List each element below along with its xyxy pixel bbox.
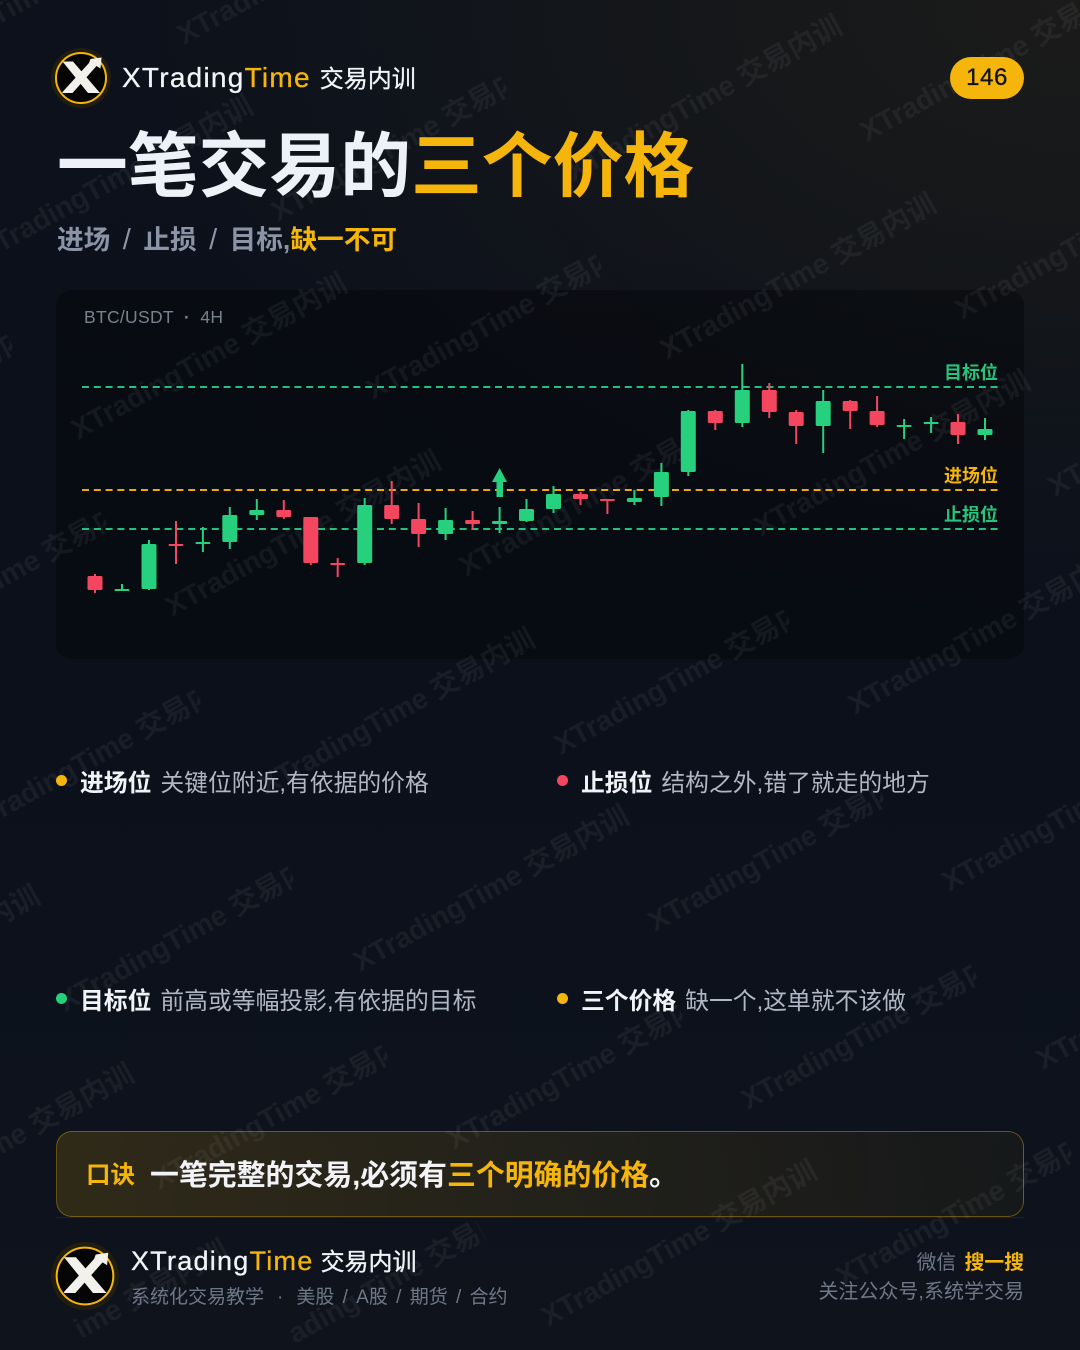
callout: mnemonic text: 一笔完整的交易,必须有三个明确的价格。 bbox=[150, 1160, 678, 1192]
panel: candlestick chart background bbox=[56, 290, 1024, 659]
callout: mnemonic text: 口诀 bbox=[86, 1162, 135, 1189]
footer tagline: 系统化交易教学 · 美股 / A股 / 期货 / 合约 bbox=[131, 1287, 508, 1308]
watermark pattern: XTradingTime 交易内训 bbox=[561, 10, 847, 188]
watermark pattern: XTradingTime 交易内训 bbox=[655, 188, 941, 366]
point: stop: 止损位 结构之外,错了就走的地方 bbox=[581, 770, 930, 797]
watermark pattern: XTradingTime 交易内训 bbox=[254, 623, 540, 801]
watermark pattern: XTradingTime 交易内训 bbox=[749, 365, 1035, 543]
watermark pattern: XTradingTime 交易内训 bbox=[361, 228, 647, 406]
header brand name: XTradingTime 交易内训 bbox=[122, 62, 416, 93]
candlestick chart bbox=[82, 364, 998, 593]
title: 一笔交易的三个价格 bbox=[57, 128, 694, 207]
icon: entry arrow bbox=[492, 468, 507, 497]
watermark pattern: XTradingTime 交易内训 bbox=[266, 50, 552, 228]
footer right: follow text: 关注公众号,系统学交易 bbox=[818, 1281, 1024, 1303]
watermark pattern: XTradingTime 交易内训 bbox=[160, 445, 446, 623]
watermark pattern: XTradingTime 交易内训 bbox=[454, 405, 740, 583]
chart symbol label: BTC/USDT · 4H bbox=[84, 307, 223, 327]
label: stop level: 止损位 bbox=[944, 505, 998, 525]
watermark pattern: ime 交易内训 bbox=[69, 1234, 234, 1345]
callout background bbox=[56, 1131, 1024, 1217]
watermark pattern: XTradingTime 交易内训 bbox=[536, 1155, 822, 1333]
point: entry: 进场位 关键位附近,有依据的价格 bbox=[80, 770, 429, 797]
issue number badge bbox=[950, 57, 1024, 99]
watermark pattern: XTradingTime 交易内训 bbox=[66, 268, 352, 446]
price levels bbox=[82, 387, 998, 529]
issue number badge: 146 bbox=[966, 64, 1008, 91]
watermark pattern: XTradingTime 交易内训 bbox=[53, 840, 339, 1018]
red candles bbox=[88, 383, 966, 593]
label: entry level: 进场位 bbox=[944, 466, 998, 486]
watermark pattern: XTradingTime 交易内训 bbox=[348, 800, 634, 978]
watermark pattern: XTradingTime 交易内训 bbox=[147, 1018, 433, 1196]
watermark pattern: XTradingTime 交易内训 bbox=[736, 938, 1022, 1116]
footer right: wechat search: 微信 搜一搜 bbox=[917, 1252, 1024, 1274]
green candles bbox=[114, 364, 992, 591]
header logo bbox=[51, 48, 111, 108]
footer logo bbox=[51, 1242, 119, 1310]
footer brand name: XTradingTime 交易内训 bbox=[131, 1246, 417, 1276]
subtitle: 进场 / 止损 / 目标,缺一不可 bbox=[57, 224, 397, 256]
watermark pattern: XTradingTime 交易内训 bbox=[442, 978, 728, 1156]
label: target level: 目标位 bbox=[944, 363, 998, 383]
watermark pattern: XTradingTime 交易内训 bbox=[643, 760, 929, 938]
watermark pattern: ading Time 交易内训 bbox=[283, 1190, 536, 1350]
watermark pattern: XTradingTime 交易内训 bbox=[549, 583, 835, 761]
point: three prices: 三个价格 缺一个,这单就不该做 bbox=[581, 988, 906, 1015]
point: target: 目标位 前高或等幅投影,有依据的目标 bbox=[80, 988, 476, 1015]
